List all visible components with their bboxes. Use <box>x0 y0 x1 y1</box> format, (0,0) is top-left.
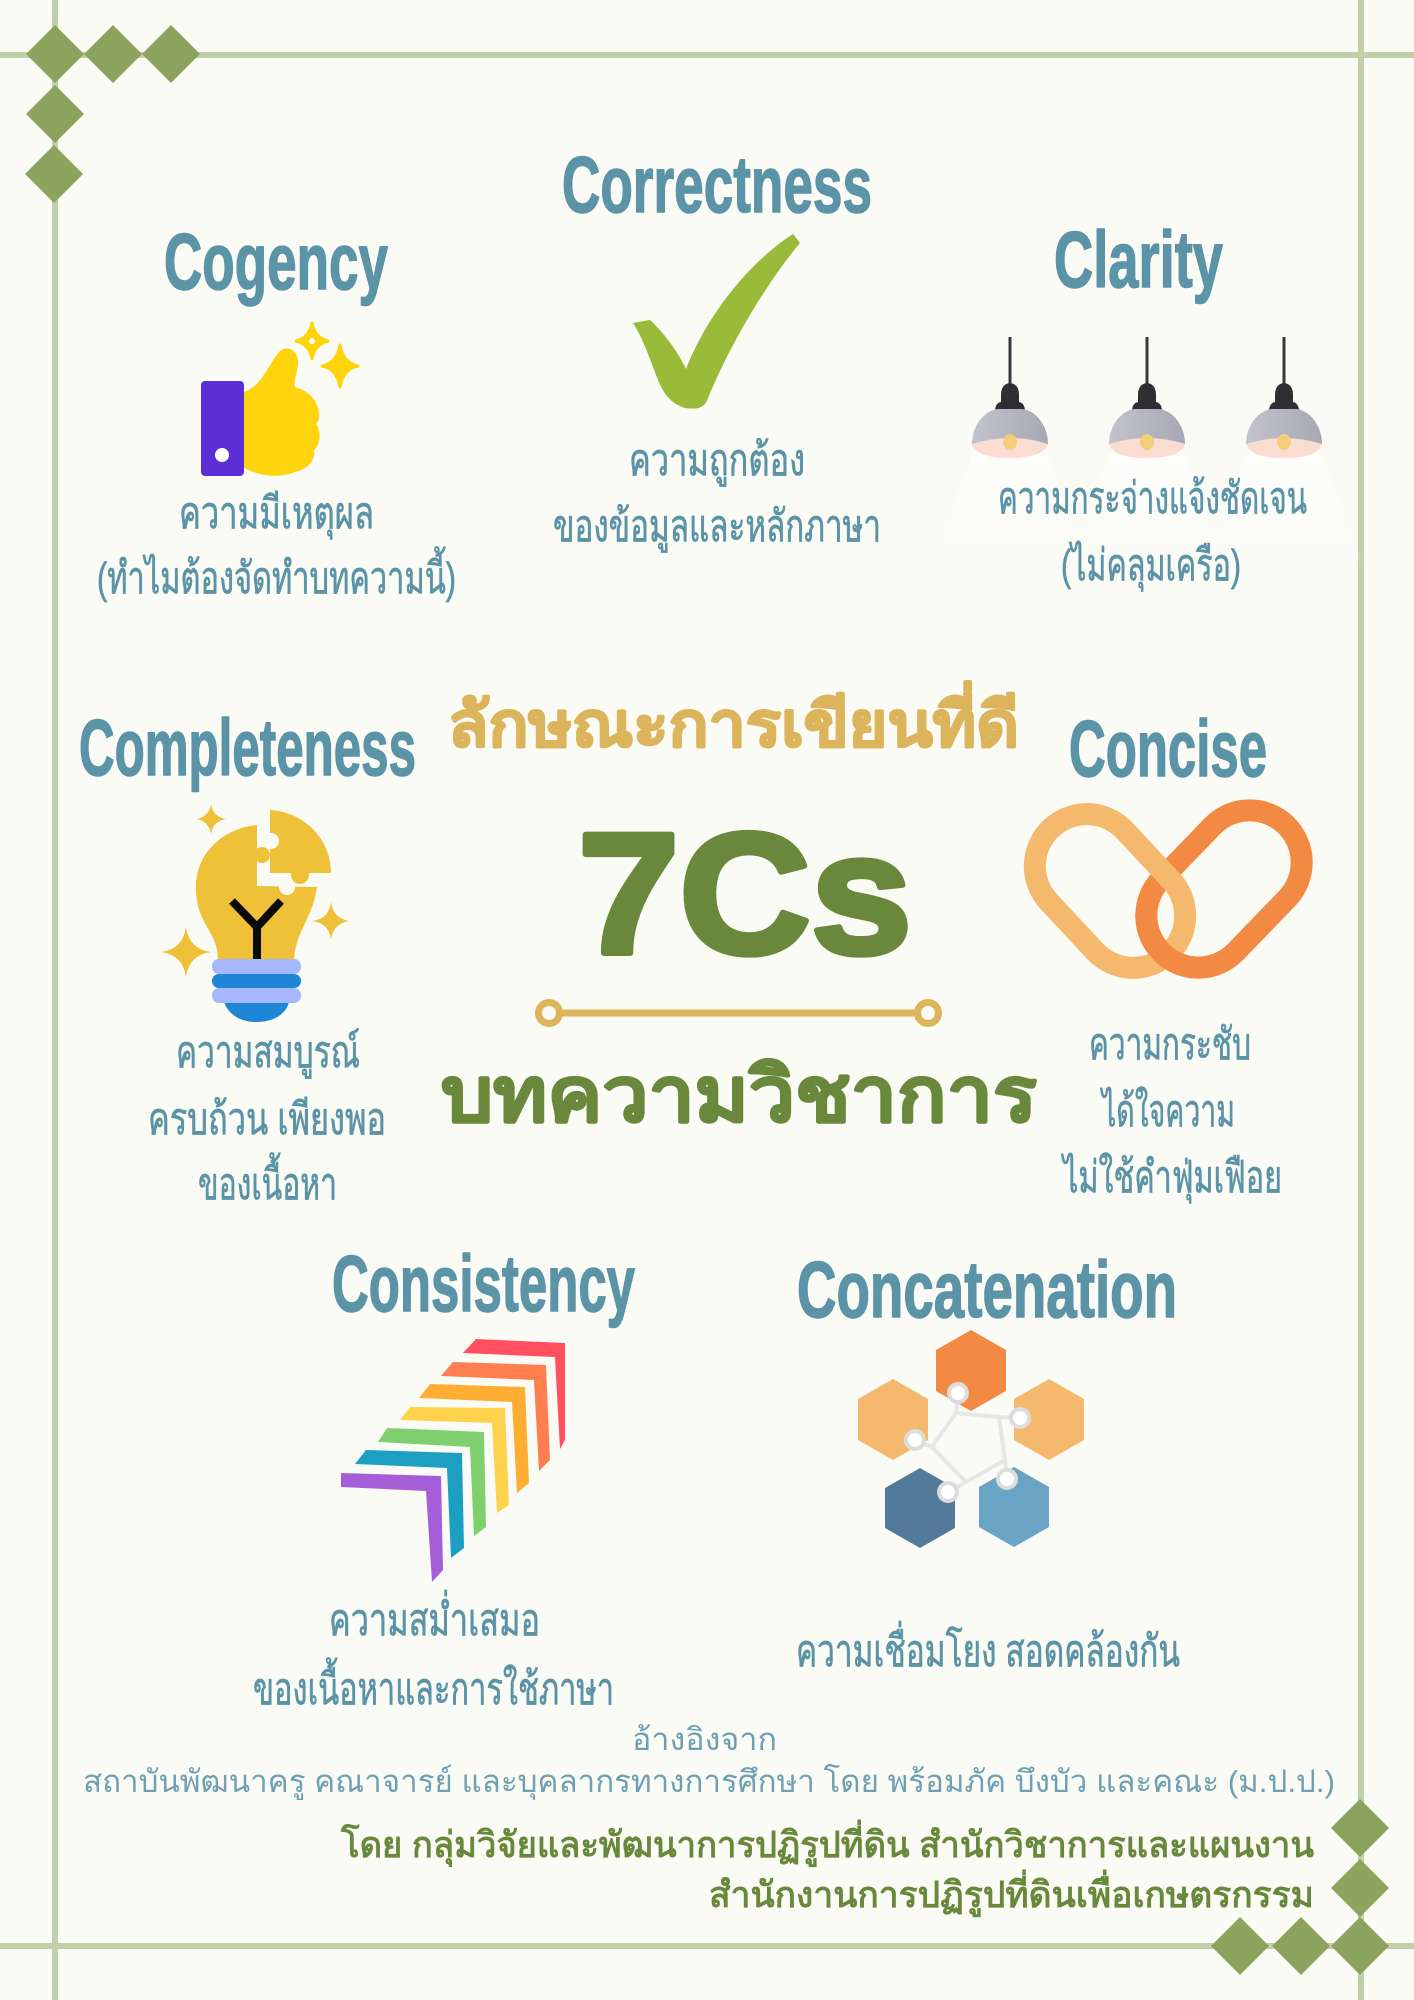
description: Clarity: (ไม่คลุมเครือ) <box>1061 540 1241 592</box>
reference text <box>83 1722 1335 1801</box>
icon: check mark <box>633 234 800 409</box>
description: Correctness: ของข้อมูลและหลักภาษา <box>553 502 881 553</box>
description: Completeness: ครบถ้วน เพียงพอ <box>148 1095 386 1144</box>
description: Clarity <box>998 474 1307 592</box>
icon: rainbow chevrons <box>341 1339 565 1582</box>
panel: center title <box>441 681 1037 1138</box>
divider with end circles <box>538 1002 938 1024</box>
credit text: โดย กลุ่มวิจัยและพัฒนาการปฏิรูปที่ดิน สำนักวิชาการและแผนงาน <box>340 1819 1314 1868</box>
panel: Consistency <box>253 1239 635 1714</box>
heading: Cogency: Cogency <box>164 217 388 306</box>
description: Consistency <box>253 1589 614 1714</box>
description: Concise: ไม่ใช้คำฟุ่มเฟือย <box>1061 1152 1282 1204</box>
description: Completeness: ความสมบูรณ์ <box>176 1028 360 1079</box>
heading: Clarity: Clarity <box>1054 215 1223 304</box>
credit text <box>340 1819 1314 1918</box>
description: Cogency <box>97 489 456 603</box>
description: Correctness: ความถูกต้อง <box>629 436 805 487</box>
description: Completeness: ของเนื้อหา <box>198 1152 337 1209</box>
reference text: อ้างอิงจาก <box>632 1722 777 1757</box>
subtitle: academic article: บทความวิชาการ <box>441 1053 1037 1138</box>
description: Completeness <box>148 1028 386 1209</box>
description: Cogency: (ทำไมต้องจัดทำบทความนี้) <box>97 546 456 603</box>
panel: Concise <box>1013 704 1323 1204</box>
panel: Clarity <box>928 215 1366 592</box>
heading: Concatenation: Concatenation <box>797 1245 1177 1334</box>
panel: Cogency <box>97 217 456 603</box>
icon: three hanging lamps <box>928 337 1366 570</box>
description: Concatenation: ความเชื่อมโยง สอดคล้องกัน <box>796 1620 1180 1676</box>
heading: Consistency: Consistency <box>332 1239 635 1328</box>
subtitle: good writing characteristics: ลักษณะการเขียนที่ดี <box>448 681 1019 760</box>
description: Concise <box>1061 1020 1282 1204</box>
heading: Correctness: Correctness <box>562 140 872 229</box>
credit text: สำนักงานการปฏิรูปที่ดินเพื่อเกษตรกรรม <box>709 1869 1314 1918</box>
icon: thumbs up <box>201 323 358 476</box>
description: Consistency: ความสม่ำเสมอ <box>329 1589 540 1645</box>
heading: Concise: Concise <box>1069 704 1267 793</box>
heading: Completeness: Completeness <box>79 703 416 792</box>
title: 7Cs: 7Cs <box>578 798 912 990</box>
description: Correctness <box>553 436 881 553</box>
icon: interlinked chain <box>1024 799 1313 979</box>
panel: Correctness <box>553 140 881 553</box>
description: Concise: ได้ใจความ <box>1100 1086 1235 1136</box>
description: Cogency: ความมีเหตุผล <box>179 489 374 540</box>
corner ornament: top left diamonds <box>25 25 200 203</box>
panel: Concatenation <box>796 1245 1180 1676</box>
description: Concise: ความกระชับ <box>1089 1020 1251 1069</box>
icon: connected hexagons <box>858 1330 1084 1548</box>
icon: puzzle light bulb <box>161 804 350 1022</box>
corner ornament: bottom right diamonds <box>1211 1799 1389 1975</box>
reference text: สถาบันพัฒนาครู คณาจารย์ และบุคลากรทางการศึกษา โดย พร้อมภัค บึงบัว และคณะ (ม.ป.ป.) <box>83 1764 1335 1801</box>
panel: Completeness <box>79 703 416 1209</box>
description: Consistency: ของเนื้อหาและการใช้ภาษา <box>253 1657 614 1714</box>
